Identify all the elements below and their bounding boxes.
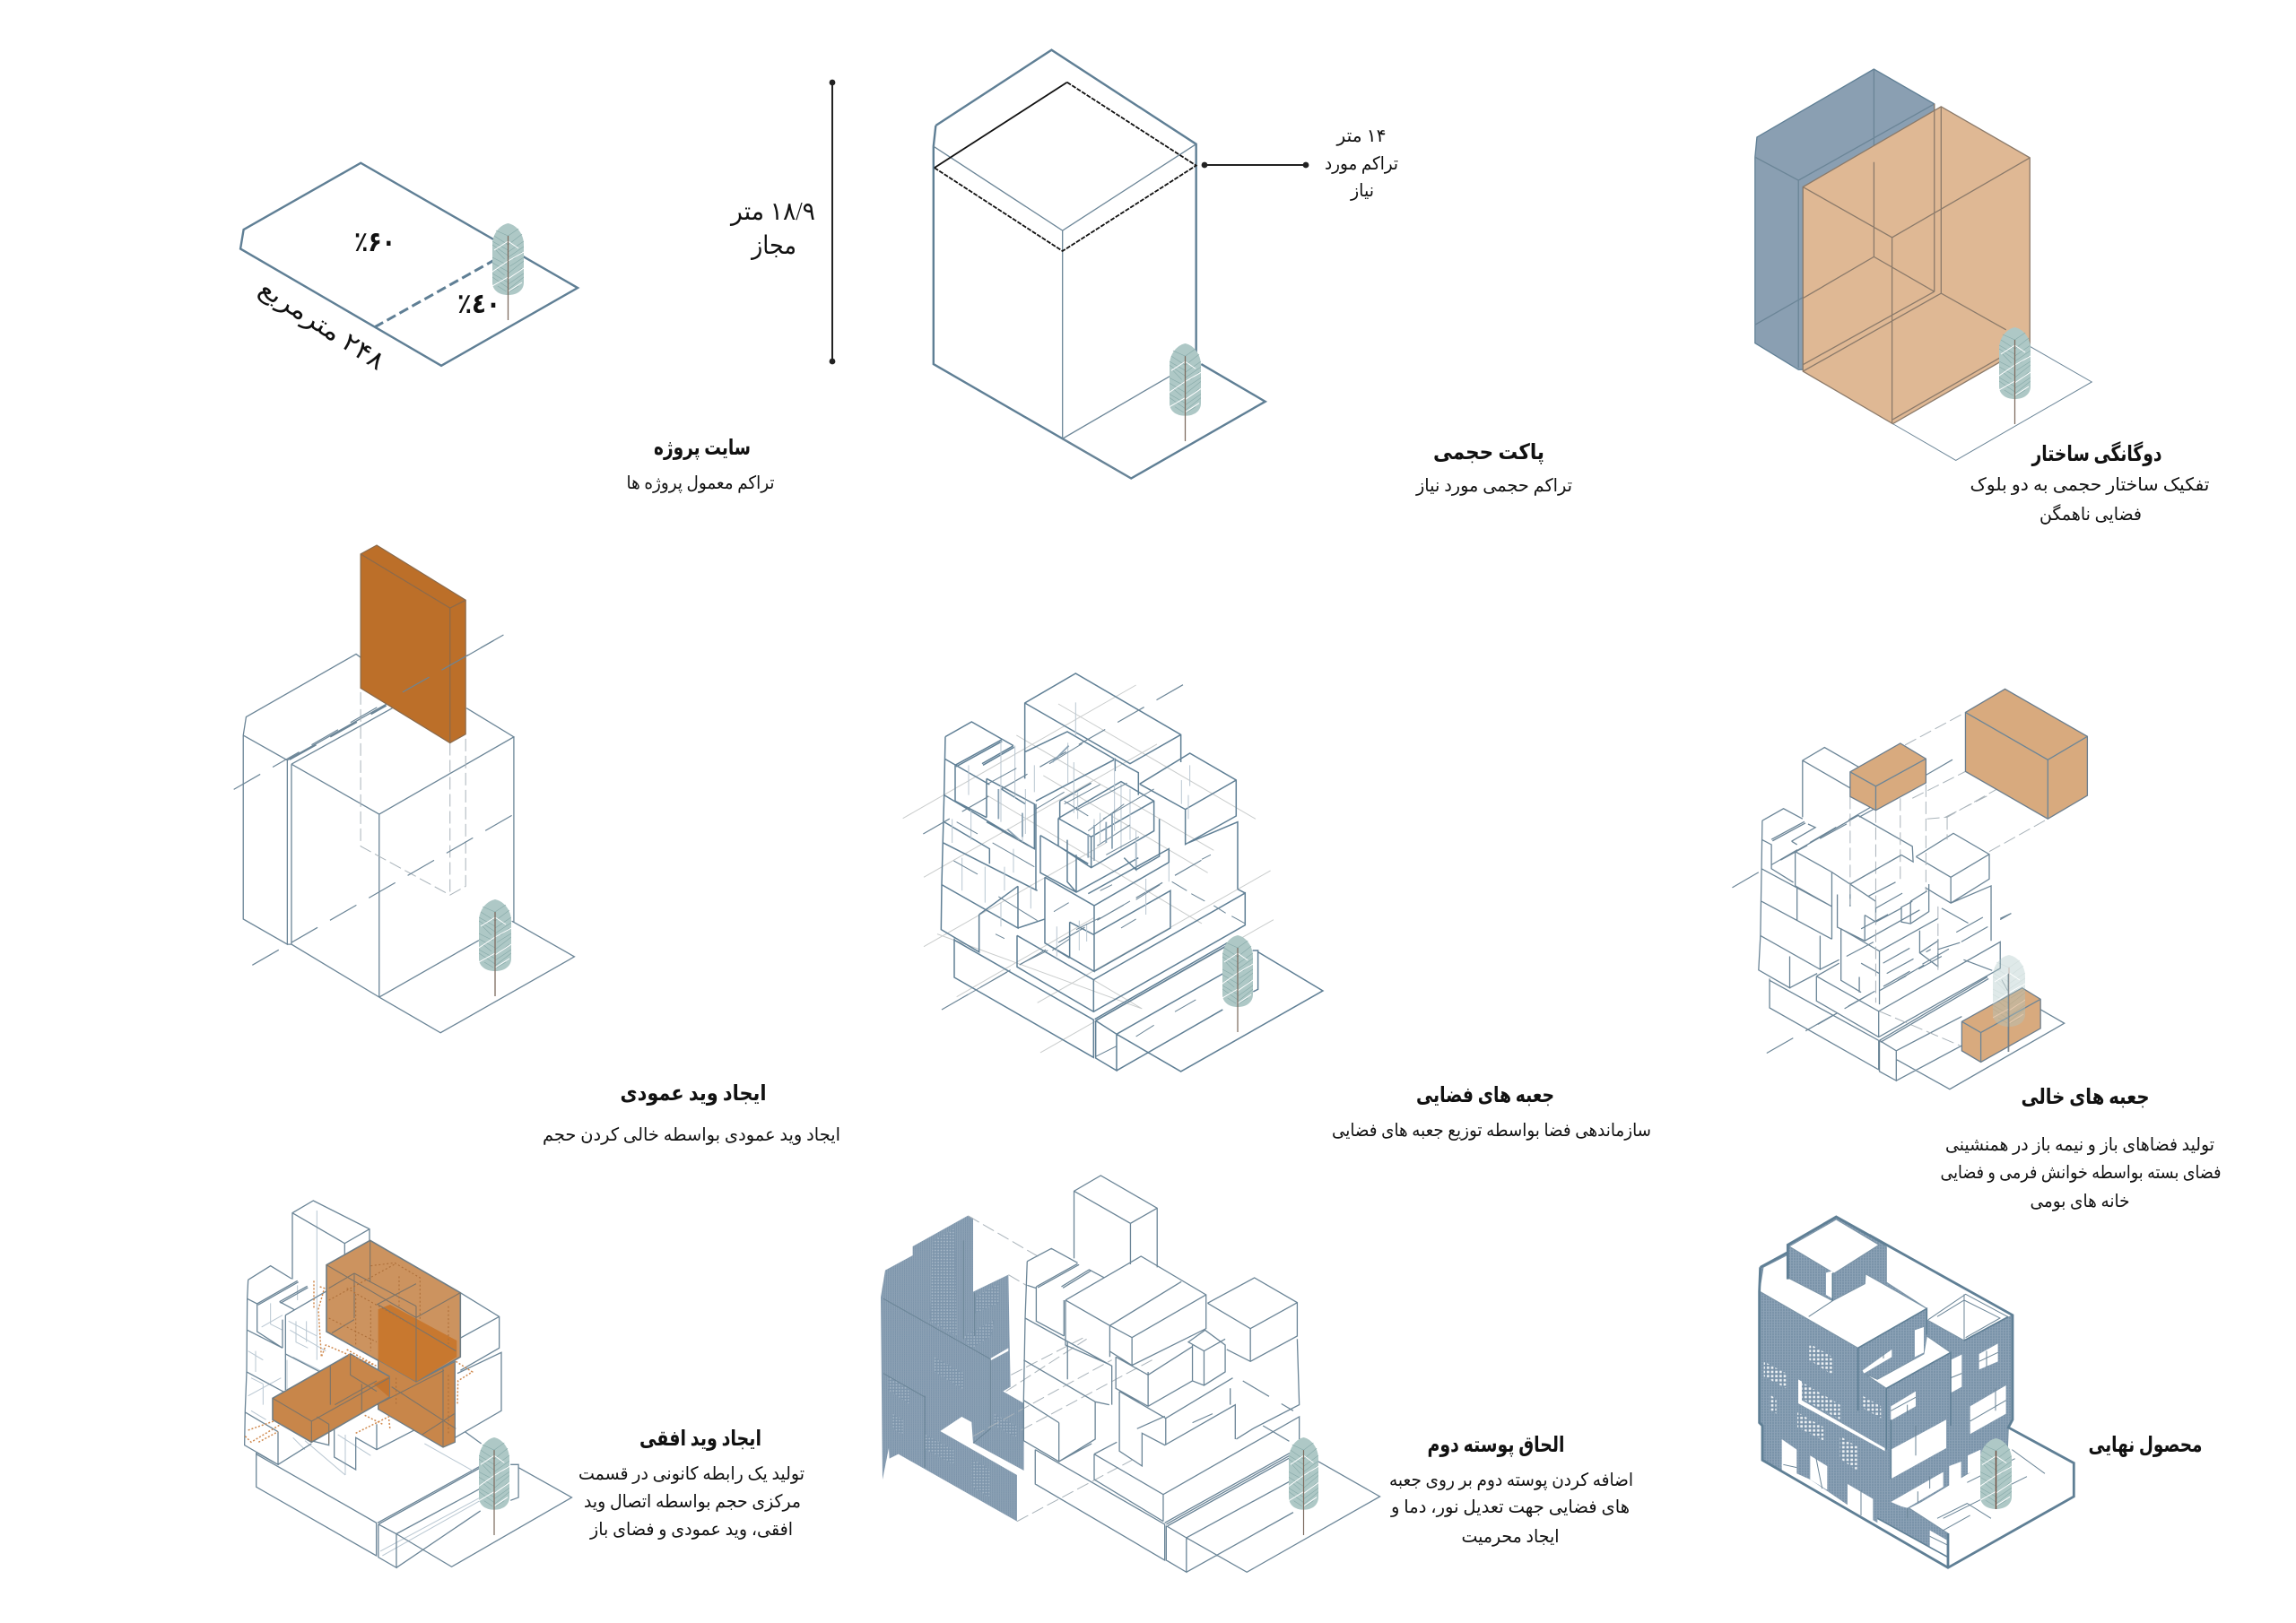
label: forty percent: ٪٤۰ <box>457 288 500 319</box>
perforated skin panel <box>881 1216 1024 1522</box>
final building axonometric <box>1760 1217 2074 1567</box>
panel: final product <box>1760 1217 2203 1567</box>
heading: محصول نهایی <box>2088 1434 2203 1457</box>
heading: سایت پروژه <box>654 437 751 460</box>
panel: horizontal void <box>245 1201 804 1567</box>
icon: tree <box>479 1437 509 1535</box>
icon: tree <box>1222 935 1253 1032</box>
label: required density <box>1325 126 1398 201</box>
icon: tree <box>1980 1438 2012 1509</box>
caption: سازماندهی فضا بواسطه توزیع جعبه های فضایی <box>1332 1121 1651 1141</box>
caption: تفکیک ساختار حجمی به دو بلوک <box>1970 475 2210 495</box>
caption: مرکزی حجم بواسطه اتصال وید <box>584 1492 801 1512</box>
caption: افقی، وید عمودی و فضای باز <box>589 1520 793 1540</box>
heading: جعبه های خالی <box>2022 1086 2149 1109</box>
panel: second skin <box>881 1176 1633 1572</box>
empty boxes axonometric <box>1732 689 2087 1089</box>
caption: تولید یک رابطه کانونی در قسمت <box>578 1464 804 1484</box>
heading: ایجاد وید عمودی <box>621 1082 766 1106</box>
panel: volume envelope <box>934 50 1572 496</box>
spatial boxes wireframe <box>903 673 1323 1072</box>
caption <box>1389 1471 1633 1547</box>
heading: جعبه های فضایی <box>1416 1084 1554 1107</box>
caption <box>1970 475 2210 525</box>
label: required density: نیاز <box>1350 181 1374 201</box>
caption: ایجاد محرمیت <box>1462 1527 1559 1547</box>
heading: ایجاد وید افقی <box>639 1428 761 1451</box>
icon: faded tree <box>1993 955 2025 1052</box>
label: allowed height: مجاز <box>750 232 796 260</box>
caption <box>578 1464 804 1540</box>
icon: tree <box>1170 343 1201 441</box>
label: allowed height <box>729 198 815 260</box>
second skin axonometric <box>969 1176 1380 1572</box>
heading: پاکت حجمی <box>1433 441 1544 464</box>
caption: تراکم معمول پروژه ها <box>626 473 775 494</box>
panel: structural duality <box>1755 69 2210 525</box>
caption: فضایی ناهمگن <box>2039 504 2142 525</box>
caption: اضافه کردن پوسته دوم بر روی جعبه <box>1389 1471 1633 1491</box>
icon: tree <box>1289 1437 1318 1535</box>
base and garden lines <box>257 1453 571 1567</box>
envelope axonometric <box>934 50 1265 479</box>
label: sixty percent: ٪۶۰ <box>354 226 396 257</box>
panel: empty boxes <box>1732 689 2221 1211</box>
icon: tree <box>1999 327 2031 424</box>
caption: های فضایی جهت تعدیل نور، دما و <box>1390 1497 1630 1517</box>
caption: تراکم حجمی مورد نیاز <box>1415 476 1572 496</box>
duality axonometric <box>1755 69 2092 460</box>
heading: الحاق پوسته دوم <box>1428 1434 1564 1457</box>
caption: ایجاد وید عمودی بواسطه خالی کردن حجم <box>543 1125 840 1145</box>
label: site area: ۲۴۸ مترمربع <box>254 274 389 376</box>
icon: tree <box>479 899 511 996</box>
label: required density: ۱۴ متر <box>1335 126 1387 146</box>
caption: فضای بسته بواسطه خوانش فرمی و فضایی <box>1941 1163 2221 1183</box>
heading: دوگانگی ساختار <box>2031 441 2161 466</box>
icon: tree <box>492 223 524 320</box>
caption <box>1941 1135 2221 1211</box>
panel: spatial boxes <box>903 673 1651 1141</box>
site axonometric <box>240 163 578 366</box>
caption: خانه های بومی <box>2031 1192 2129 1211</box>
caption: تولید فضاهای باز و نیمه باز در همنشینی <box>1945 1135 2214 1155</box>
label: allowed height: ۱۸/۹ متر <box>729 198 815 226</box>
dimension line: height <box>830 80 835 364</box>
boxes with orange voids <box>245 1201 501 1475</box>
vertical void axonometric <box>234 545 574 1033</box>
panel: vertical void <box>234 545 840 1145</box>
dimension line: required <box>1202 162 1309 168</box>
panel: site plan <box>240 80 835 494</box>
label: required density: تراکم مورد <box>1325 154 1398 174</box>
